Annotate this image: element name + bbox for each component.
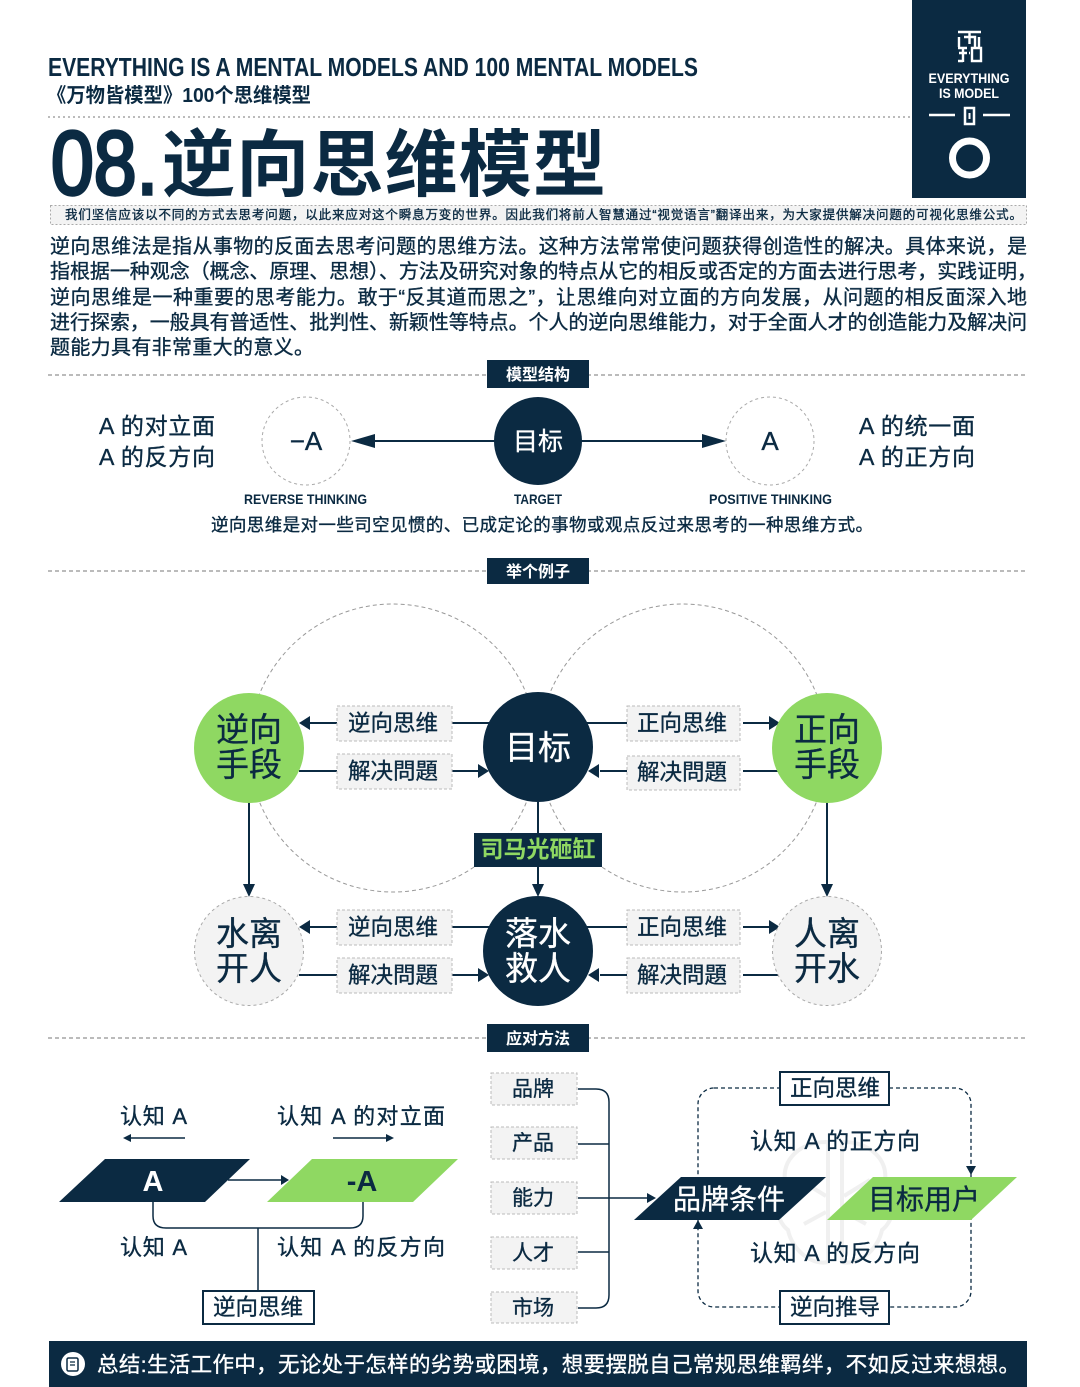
connector lines: [249, 723, 827, 975]
top labels: 认知 A: [120, 1104, 187, 1129]
node: 正向手段: [772, 693, 882, 803]
method: factor list: [491, 1073, 656, 1323]
process labels: 逆向思维: [348, 915, 438, 940]
node: 落水救人: 救人: [505, 950, 571, 987]
method: brand and user loop: [634, 1072, 1017, 1324]
intro strip: 我们坚信应该以不同的方式去思考问题，以此来应对这个瞬息万变的世界。因此我们将前人智慧通过“视觉语言”翻译出来，为大家提供解决问题的可视化思维公式。: [65, 207, 1022, 222]
box: 正向思维: 正向思维: [790, 1076, 880, 1101]
process labels: [337, 706, 740, 993]
box: 逆向思维: [203, 1291, 314, 1324]
node: 落水救人: 落水: [505, 915, 571, 952]
node: 目标: [483, 692, 593, 802]
factor boxes: 产品: [512, 1132, 554, 1155]
node: 正向手段: 手段: [794, 746, 860, 783]
loop arrowheads: [966, 1166, 976, 1175]
top labels: [120, 1104, 445, 1129]
factor boxes: 品牌: [512, 1078, 554, 1101]
node: 人离开水: 人离: [794, 915, 860, 952]
axis captions: [244, 491, 832, 507]
process labels: 解决問題: [637, 963, 727, 988]
process labels: 正向思维: [637, 711, 727, 736]
background dashed circles: [249, 604, 827, 892]
node: 目标: 目标: [505, 729, 571, 766]
parallelogram: 目标用户: 目标用户: [868, 1184, 980, 1215]
example diagram: [194, 604, 882, 1006]
parallelogram: A: A: [143, 1166, 164, 1198]
heading: 举个例子: [487, 558, 589, 584]
parallelogram: 品牌条件: [634, 1177, 826, 1220]
node: 逆向手段: 手段: [216, 746, 282, 783]
factor boxes: 能力: [512, 1187, 554, 1210]
body paragraph: 进行探索，一般具有普适性、批判性、新颖性等特点。个人的逆向思维能力，对于全面人才的创造能力及解决问: [50, 311, 1027, 334]
label: 司马光砸缸: 司马光砸缸: [480, 836, 596, 862]
brand sidebar: [912, 0, 1026, 198]
factor boxes: 人才: [512, 1242, 554, 1265]
heading: 模型结构: 模型结构: [506, 366, 570, 384]
circle: target: [494, 397, 582, 485]
loop labels: 认知 A 的正方向: [750, 1128, 920, 1154]
node: 落水救人: [483, 896, 593, 1006]
circle: -A: −A: [290, 426, 323, 456]
arrowheads: [243, 716, 833, 982]
loop labels: [750, 1128, 920, 1266]
box: 正向思维: [780, 1072, 889, 1105]
node: 人离开水: 开水: [794, 950, 860, 987]
summary bar: [49, 1341, 1027, 1387]
top labels: 认知 A 的对立面: [277, 1104, 445, 1129]
body paragraph: [50, 235, 1037, 359]
circle: A: A: [761, 426, 779, 456]
brand sidebar: IS MODEL: [939, 85, 999, 101]
left labels: A 的对立面: [99, 413, 215, 439]
box: 逆向推导: 逆向推导: [790, 1295, 880, 1320]
left labels: [99, 413, 215, 470]
main title: [51, 114, 606, 214]
heading: 应对方法: [487, 1024, 589, 1052]
process labels: 正向思维: [637, 915, 727, 940]
left labels: A 的反方向: [99, 444, 215, 470]
small direction arrows: [123, 1134, 394, 1142]
process labels: 逆向思维: [348, 711, 438, 736]
heading: 应对方法: 应对方法: [506, 1029, 570, 1048]
node: 正向手段: 正向: [794, 711, 860, 748]
main title: 逆向思维模型: [162, 125, 606, 206]
process labels: 解决問題: [637, 760, 727, 785]
dashed loop: [698, 1088, 971, 1307]
box: 逆向思维: 逆向思维: [213, 1295, 303, 1320]
node: 人离开水: [772, 896, 882, 1006]
node: 水离开人: [194, 896, 304, 1006]
loop labels: 认知 A 的反方向: [750, 1240, 920, 1266]
english heading: EVERYTHING IS A MENTAL MODELS AND 100 MENTAL MODELS: [48, 52, 698, 82]
circle: target: 目标: [513, 428, 563, 456]
bracket lines: [578, 1089, 650, 1308]
parallelogram: -A: [267, 1159, 458, 1202]
node: 逆向手段: [194, 693, 304, 803]
bottom labels: [120, 1235, 445, 1260]
icon: faint brain: [777, 1142, 893, 1263]
arrow: target to both sides: [351, 434, 726, 448]
process labels: 解决問題: [348, 963, 438, 988]
bottom labels: 认知 A 的反方向: [277, 1235, 445, 1260]
node: 水离开人: 水离: [216, 915, 282, 952]
node: 水离开人: 开人: [216, 950, 282, 987]
brand sidebar: EVERYTHING: [928, 70, 1010, 86]
icon: note: [61, 1352, 85, 1376]
model structure diagram: [99, 397, 975, 535]
heading: 模型结构: [487, 360, 589, 388]
axis captions: POSITIVE THINKING: [709, 491, 832, 507]
arrow: A to -A: [228, 1175, 289, 1185]
body paragraph: 逆向思维法是指从事物的反面去思考问题的思维方法。这种方法常常使问题获得创造性的解决。具体来说，是: [50, 235, 1027, 258]
right labels: [859, 413, 975, 470]
right labels: A 的统一面: [859, 413, 975, 439]
body paragraph: 题能力具有非常重大的意义。: [50, 336, 314, 359]
body paragraph: 逆向思维是一种重要的思考能力。敢于“反其道而思之”，让思维向对立面的方向发展，从问题的相反面深入地: [50, 286, 1027, 309]
body paragraph: 指根据一种观念（概念、原理、思想）、方法及研究对象的特点从它的相反或否定的方面去进行思考，实践证明，: [50, 259, 1037, 283]
icon: divider link: [929, 108, 1010, 124]
bottom labels: 认知 A: [120, 1235, 187, 1260]
parallelogram: 目标用户: [827, 1177, 1017, 1220]
circle: A: [726, 397, 814, 485]
definition sentence: 逆向思维是对一些司空见惯的、已成定论的事物或观点反过来思考的一种思维方式。: [211, 515, 873, 535]
chinese subheading: 《万物皆模型》100个思维模型: [47, 84, 311, 107]
parallelogram: -A: -A: [347, 1166, 377, 1198]
right labels: A 的正方向: [859, 444, 975, 470]
process labels: 解决問題: [348, 759, 438, 784]
node: 逆向手段: 逆向: [216, 711, 282, 748]
method: A to -A diagram: [59, 1104, 458, 1324]
bracket to 逆向思维: [153, 1202, 363, 1291]
icon: brand logo: [958, 32, 981, 62]
axis captions: REVERSE THINKING: [244, 491, 367, 507]
label: 司马光砸缸: [474, 833, 602, 867]
parallelogram: 品牌条件: 品牌条件: [673, 1184, 785, 1215]
icon: ring: [952, 141, 986, 175]
heading: 举个例子: 举个例子: [506, 562, 570, 581]
summary bar: 总结:生活工作中，无论处于怎样的劣势或困境，想要摆脱自己常规思维羁绊，不如反过来想想。: [97, 1353, 1020, 1377]
header titles: [47, 52, 698, 107]
parallelogram: A: [59, 1159, 250, 1202]
box: 逆向推导: [780, 1291, 889, 1324]
main title: 08.: [51, 114, 158, 214]
circle: -A: [262, 397, 350, 485]
factor boxes: 市场: [512, 1297, 554, 1320]
axis captions: TARGET: [514, 491, 562, 507]
factor boxes: [491, 1073, 577, 1323]
